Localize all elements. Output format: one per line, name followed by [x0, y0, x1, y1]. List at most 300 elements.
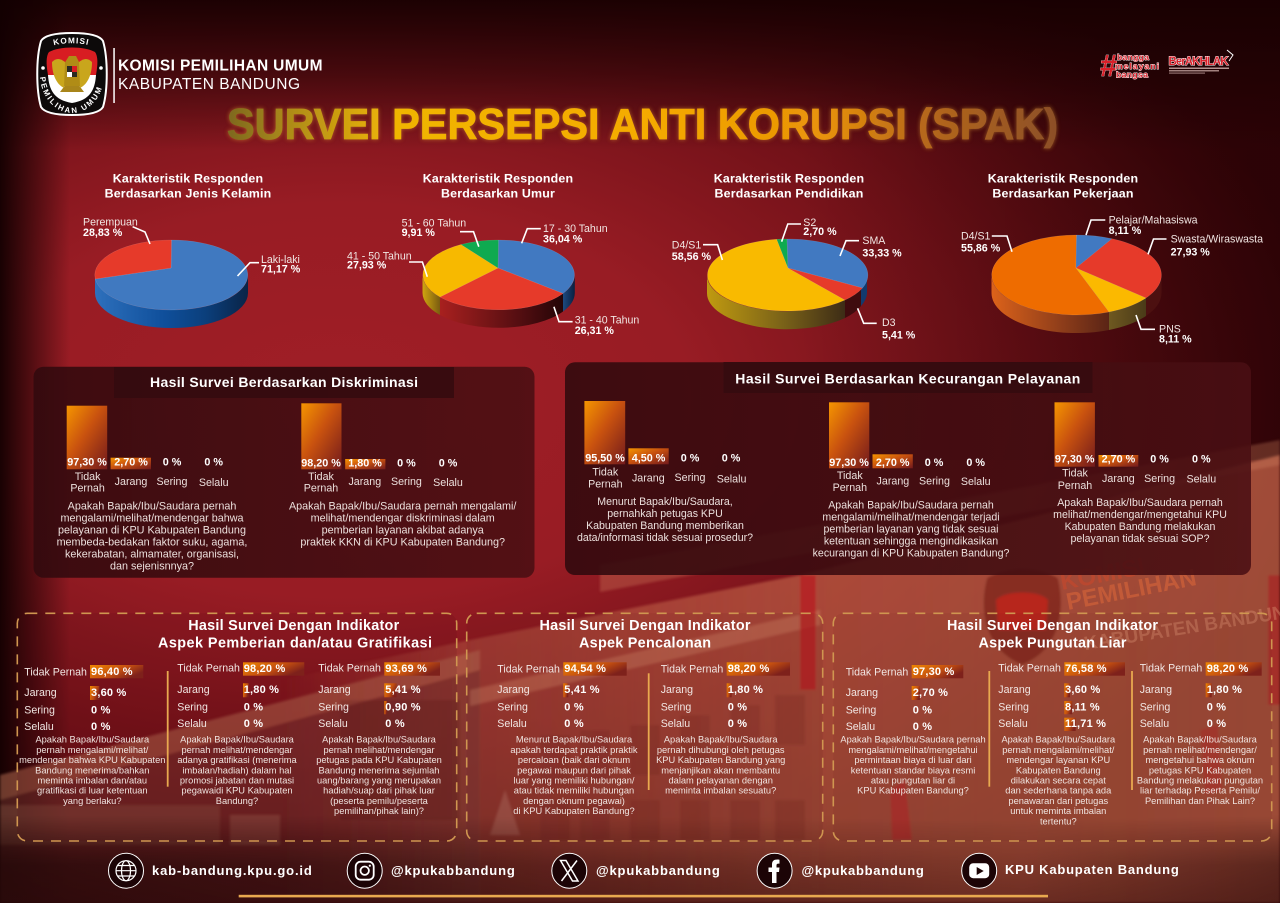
results: pungutan liar question 3: Jarang — [1140, 684, 1172, 696]
results: pencalonan question 1: 5,41 % — [564, 684, 600, 696]
question text: pernah melihat/mendengar/ — [1143, 745, 1257, 755]
question text: Apakah Bapak/Ibu/Saudara — [1143, 735, 1258, 745]
bar chart: question 3: Sering — [675, 472, 705, 484]
question 1 text: Apakah Bapak/Ibu/Saudara pernah — [68, 500, 236, 512]
question text: adanya gratifikasi (menerima — [177, 755, 298, 765]
bar chart: question 3: 4,50 % — [632, 453, 666, 465]
question text: dengan oknum pegawai) — [523, 796, 625, 806]
question text: hadiah/suap dari pihak luar — [323, 786, 435, 796]
label: 41-50 Tahun — [347, 250, 427, 277]
bar chart: question 3 — [584, 401, 747, 491]
question text: mendengar bahwa KPU Kabupaten — [19, 755, 165, 765]
panel: gratifikasi — [17, 613, 457, 841]
label: D4/S1 — [672, 239, 722, 263]
question text: di KPU Kabupaten Bandung? — [513, 806, 635, 816]
results: gratifikasi question 3: 93,69 % — [385, 663, 427, 675]
bar chart: question 5: 0 % — [1150, 454, 1169, 466]
results: gratifikasi question 1: 0 % — [91, 705, 111, 717]
bar chart: question 2 — [301, 403, 463, 495]
bar chart: question 4: Tidak — [837, 470, 863, 482]
bar chart: question 1: Sering — [157, 476, 187, 488]
bar chart: question 3: 0 % — [722, 453, 741, 465]
results: gratifikasi question 2: 98,20 % — [244, 663, 285, 675]
header logo: KPU emblem: PEMILIHAN UMUM — [40, 76, 102, 114]
chart heading: Karakteristik Responden — [423, 172, 573, 186]
bar chart: question 4: 0 % — [925, 457, 944, 469]
bar chart: question 1: Jarang — [115, 476, 147, 488]
results: pencalonan question 2: Jarang — [661, 684, 693, 696]
chart heading — [714, 172, 864, 200]
label: 17-30 Tahun: 17 - 30 Tahun — [543, 223, 608, 235]
question text: dan sederhana tanpa ada — [1005, 786, 1112, 796]
chart heading: Karakteristik Responden — [714, 172, 864, 186]
footer: X: @kpukabbandung — [596, 863, 720, 878]
results: pungutan liar question 2: 76,58 % — [1065, 663, 1107, 675]
header divider — [113, 48, 115, 103]
label: 51-60 Tahun: 51 - 60 Tahun — [402, 218, 466, 230]
question text: pernah melihat/mendengar — [323, 745, 435, 755]
bar chart: question 3: 95,50 % — [585, 453, 625, 465]
header logo: KPU emblem — [36, 32, 108, 116]
results: gratifikasi question 2: Selalu — [177, 718, 207, 730]
panel heading — [540, 618, 751, 651]
label: PNS: 8,11 % — [1159, 333, 1192, 345]
results: pencalonan question 1: 94,54 % — [564, 663, 606, 675]
results: pungutan liar question 1: 97,30 % — [913, 666, 954, 678]
results: gratifikasi question 2: 1,80 % — [244, 684, 279, 696]
results: pungutan liar question 2: Sering — [998, 701, 1029, 713]
results: gratifikasi question 3: Selalu — [318, 718, 348, 730]
panel heading: Hasil Survei Berdasarkan Diskriminasi — [150, 374, 418, 390]
results: gratifikasi question 3: 0,90 % — [385, 701, 421, 713]
results: gratifikasi question 3 — [318, 662, 440, 730]
results: pungutan liar question 2: 11,71 % — [1065, 718, 1106, 730]
title: SURVEI PERSEPSI ANTI KORUPSI (SPAK) — [227, 100, 1058, 149]
label: Laki-laki: 71,17 % — [261, 264, 301, 276]
results: pungutan liar question 1: 2,70 % — [913, 687, 948, 699]
question text: Apakah Bapak/Ibu/Saudara — [35, 735, 150, 745]
chart heading — [423, 172, 573, 200]
label: SMA: SMA — [862, 235, 886, 247]
divider — [167, 671, 169, 787]
results: gratifikasi question 2 — [177, 662, 304, 730]
background photo: KPU building: PEMILIHAN — [1064, 564, 1199, 616]
question 5 text: Kabupaten Bandung melakukan — [1065, 521, 1215, 533]
results: gratifikasi question 1 — [24, 665, 143, 733]
results: pencalonan question 1: Selalu — [497, 718, 527, 730]
results: pencalonan question 2: 98,20 % — [728, 663, 769, 675]
panel heading: Aspek Pemberian dan/atau Gratifikasi — [158, 635, 432, 651]
bar chart: question 5: Sering — [1144, 473, 1175, 485]
chart heading: Berdasarkan Umur — [441, 186, 555, 200]
panel: age pie chart — [347, 172, 639, 337]
label: 31-40 Tahun: 26,31 % — [575, 325, 614, 337]
chart heading — [988, 172, 1138, 200]
label: SMA: 33,33 % — [862, 248, 902, 260]
question 3 text: data/informasi tidak sesuai prosedur? — [577, 532, 753, 544]
bar chart: question 2: 1,80 % — [348, 458, 382, 470]
question text: atau tidak memiliki hubungan — [514, 786, 634, 796]
chart heading: Berdasarkan Pekerjaan — [992, 186, 1134, 200]
bar chart: question 5: Selalu — [1186, 474, 1216, 486]
label: Swasta/Wiraswasta: 27,93 % — [1171, 246, 1210, 258]
bar chart: question 2: Selalu — [433, 477, 463, 489]
bar chart: question 5: 2,70 % — [1102, 454, 1136, 466]
label: Swasta/Wiraswasta — [1148, 234, 1263, 258]
pie — [991, 235, 1162, 333]
label: Pelajar/Mahasiswa: 8,11 % — [1109, 225, 1142, 237]
bar chart: question 1 — [67, 406, 229, 495]
results: gratifikasi question 3: Sering — [318, 701, 349, 713]
results: gratifikasi question 2: Sering — [177, 701, 208, 713]
results: pungutan liar question 3: 1,80 % — [1207, 684, 1242, 696]
question text: pegawaidi KPU Kabupaten — [181, 786, 293, 796]
question text: pernah mengalami/melihat/ — [1002, 745, 1115, 755]
label: 17-30 Tahun: 36,04 % — [543, 234, 583, 246]
question 1 text: mengalami/melihat/mendengar bahwa — [60, 512, 244, 524]
label: D4/S1: 55,86 % — [961, 242, 1001, 254]
panel heading: Aspek Pungutan Liar — [978, 635, 1127, 651]
results: gratifikasi question 1: 3,60 % — [91, 687, 126, 699]
question 1 text: dan sejenisnnya? — [110, 560, 194, 572]
panel heading — [724, 362, 1092, 393]
question 5 text: pelayanan tidak sesuai SOP? — [1070, 533, 1210, 545]
results: gratifikasi question 2: 0 % — [244, 718, 263, 730]
results: gratifikasi question 3: Tidak Pernah — [318, 663, 381, 675]
question 4 text: kecurangan di KPU Kabupaten Bandung? — [813, 547, 1009, 559]
question text: imbalan/hadiah) dalam hal — [182, 765, 292, 775]
footer: facebook — [757, 853, 924, 888]
question text: gratifikasi di luar ketentuan — [37, 786, 148, 796]
question text: permintaan biaya di luar dari — [854, 755, 972, 765]
label: Pelajar/Mahasiswa: Pelajar/Mahasiswa — [1109, 214, 1198, 226]
question text: apakah terdapat praktik praktik — [510, 745, 638, 755]
panel: pungutan liar — [833, 613, 1272, 841]
question 5 text: Apakah Bapak/Ibu/Saudara pernah — [1057, 497, 1223, 509]
bar chart: question 3: 0 % — [681, 453, 700, 465]
question text: Apakah Bapak/Ibu/Saudara — [1001, 735, 1116, 745]
bar chart: question 4: 2,70 % — [876, 457, 910, 469]
question text: ketentuan standar biaya resmi — [851, 765, 975, 775]
label: Laki-laki: Laki-laki — [261, 254, 300, 266]
results: gratifikasi question 2: Tidak Pernah — [177, 663, 240, 675]
results: pungutan liar question 3: Tidak Pernah — [1140, 663, 1202, 675]
results: pungutan liar question 3: Selalu — [1140, 718, 1169, 730]
bar chart: question 5: Pernah — [1058, 480, 1092, 492]
results: gratifikasi question 3: 0 % — [385, 718, 405, 730]
question text: Apakah Bapak/Ibu/Saudara — [180, 735, 295, 745]
footer: X — [552, 853, 720, 888]
bar chart: question 4: 97,30 % — [829, 457, 869, 469]
results: pencalonan question 2: Selalu — [661, 718, 690, 730]
results: pencalonan question 2: Tidak Pernah — [661, 663, 723, 675]
bar chart: question 4: Selalu — [961, 476, 991, 488]
question 3 text: pernahkah petugas KPU — [607, 508, 723, 520]
footer: facebook: @kpukabbandung — [802, 863, 924, 878]
bar chart: question 2: Pernah — [304, 483, 338, 495]
bar chart: question 1: 97,30 % — [67, 457, 107, 469]
bar chart: question 5: 97,30 % — [1055, 454, 1095, 466]
results: pencalonan question 2: Sering — [661, 701, 691, 713]
question 1 text: membeda-bedakan faktor suku, agama, — [57, 536, 247, 548]
question 1 text: pelayanan di KPU Kabupaten Bandung — [58, 524, 246, 536]
bar chart: question 5: 0 % — [1192, 454, 1211, 466]
pie — [422, 240, 575, 328]
question text: meminta imbalan dan/atau — [38, 776, 147, 786]
panel: occupation pie chart — [961, 172, 1263, 345]
question 5 text: melihat/mendengar/mengetahui KPU — [1053, 509, 1227, 521]
footer: youtube — [962, 853, 1179, 888]
question text: untuk meminta imbalan — [1010, 806, 1106, 816]
panel heading: Hasil Survei Dengan Indikator — [188, 618, 400, 634]
label: 41-50 Tahun: 27,93 % — [347, 260, 387, 272]
results: pungutan liar question 2: Tidak Pernah — [998, 663, 1061, 675]
bar chart: question 5: Tidak — [1062, 468, 1089, 480]
label: S2 — [782, 217, 837, 242]
question text: pernah melihat/mendengar — [181, 745, 293, 755]
question 4 text: mengalami/melihat/mendengar terjadi — [822, 511, 1000, 523]
footer: website — [108, 853, 312, 888]
panel: kecurangan pelayanan — [565, 362, 1251, 575]
results: pungutan liar question 1: Tidak Pernah — [846, 667, 908, 679]
pie — [95, 240, 248, 328]
bar chart: question 1: 0 % — [204, 457, 223, 469]
panel heading — [947, 618, 1158, 651]
organisation name: KOMISI PEMILIHAN UMUM — [118, 58, 322, 75]
question text: pernah mengalami/melihat/ — [36, 745, 149, 755]
question text: Bandung menerima/bahkan — [35, 765, 149, 775]
panel: diskriminasi — [34, 367, 534, 578]
bar chart: question 4: 0 % — [966, 457, 985, 469]
panel heading: Aspek Pencalonan — [579, 635, 711, 651]
divider — [648, 673, 650, 790]
results: pungutan liar question 2: 8,11 % — [1065, 701, 1100, 713]
results: gratifikasi question 3: 5,41 % — [385, 684, 421, 696]
bar chart: question 4: Jarang — [877, 475, 909, 487]
question 2 text: praktek KKN di KPU Kabupaten Bandung? — [300, 536, 505, 548]
question text: pegawai maupun dari pihak — [517, 765, 631, 775]
bar chart: question 4: Pernah — [833, 482, 867, 494]
question text: pernah dihubungi oleh petugas — [657, 745, 785, 755]
logo: bangga melayani bangsa: melayani — [1115, 61, 1159, 71]
results: pungutan liar question 1: 0 % — [913, 705, 932, 717]
label: 51-60 Tahun — [402, 218, 479, 247]
results: pungutan liar question 2: Jarang — [998, 684, 1031, 696]
question 1 text: kekerabatan, almamater, organisasi, — [65, 548, 239, 560]
question text: KPU Kabupaten Bandung? — [857, 786, 969, 796]
chart heading: Berdasarkan Jenis Kelamin — [105, 186, 271, 200]
label: 41-50 Tahun: 41 - 50 Tahun — [347, 250, 412, 262]
divider — [988, 671, 990, 787]
results: gratifikasi question 1: Jarang — [24, 687, 57, 699]
question text: Apakah Bapak/Ibu/Saudara pernah — [840, 735, 986, 745]
bar chart: question 2: 0 % — [439, 458, 458, 470]
label: PNS — [1136, 315, 1192, 345]
results: pungutan liar question 1: Jarang — [846, 687, 878, 699]
label: 31-40 Tahun — [554, 307, 639, 337]
results: gratifikasi question 1: Sering — [24, 704, 55, 716]
question text: Bandung? — [216, 796, 258, 806]
results: pencalonan question 2: 0 % — [728, 718, 747, 730]
label: Perempuan: 28,83 % — [83, 227, 123, 239]
question 2 text: melihat/mendengar diskriminasi dalam — [311, 512, 495, 524]
panel heading: Hasil Survei Dengan Indikator — [947, 618, 1158, 634]
question 4 text: ketentuan sehingga mengindikasikan — [824, 535, 998, 547]
question text: Pemilihan dan Pihak Lain? — [1145, 796, 1255, 806]
bar chart: question 1: Selalu — [199, 477, 229, 489]
question text: uang/barang yang merupakan — [317, 776, 441, 786]
label: Laki-laki — [238, 254, 301, 276]
label: PNS: PNS — [1159, 323, 1181, 335]
label: Perempuan: Perempuan — [83, 217, 138, 229]
question text: Apakah Bapak/Ibu/Saudara — [664, 735, 778, 745]
results: pungutan liar question 2: 3,60 % — [1065, 684, 1100, 696]
panel heading — [158, 618, 432, 651]
results: pungutan liar question 3: 0 % — [1207, 718, 1226, 730]
question text: (peserta pemilu/peserta — [330, 796, 429, 806]
background photo: KPU building: KOMISI — [1058, 553, 1147, 596]
results: gratifikasi question 1: 0 % — [91, 721, 111, 733]
question text: mengalami/melihat/mengetahui — [848, 745, 978, 755]
question text: Kabupaten Bandung — [1016, 765, 1101, 775]
results: pencalonan question 1: 0 % — [564, 701, 584, 713]
question 2 text: pemberian layanan akibat adanya — [322, 524, 484, 536]
bar chart: question 2: 0 % — [397, 458, 416, 470]
logo: BerAKHLAK — [1168, 50, 1233, 74]
bar chart: question 3: Selalu — [717, 473, 747, 485]
results: pungutan liar question 3: Sering — [1140, 701, 1170, 713]
question 3 text: Kabupaten Bandung memberikan — [586, 520, 744, 532]
question text: atau pungutan liar di — [871, 776, 955, 786]
results: pencalonan question 1: Tidak Pernah — [497, 663, 560, 675]
question text: mengetahui bahwa oknum — [1145, 755, 1255, 765]
label: D4/S1: 58,56 % — [672, 251, 712, 263]
divider — [1131, 671, 1133, 790]
question text: Bandung melakukan pungutan — [1137, 776, 1263, 786]
results: pencalonan question 1 — [497, 662, 627, 730]
panel heading: Hasil Survei Dengan Indikator — [540, 618, 751, 634]
results: pungutan liar question 2 — [998, 662, 1125, 731]
bar chart: question 1: 0 % — [163, 457, 182, 469]
question text: luar yang memiliki hubungan/ — [514, 776, 635, 786]
results: pencalonan question 1: Sering — [497, 701, 528, 713]
results: pungutan liar question 3: 0 % — [1207, 701, 1226, 713]
bar chart: question 2: Tidak — [308, 471, 335, 483]
results: gratifikasi question 1: Selalu — [24, 721, 54, 733]
results: pungutan liar question 1: Selalu — [846, 721, 875, 733]
question text: petugas pada KPU Kabupaten — [316, 755, 442, 765]
question text: dilakukan secara cepat — [1011, 776, 1106, 786]
footer: instagram: @kpukabbandung — [391, 863, 515, 878]
panel heading: Hasil Survei Berdasarkan Kecurangan Pelayanan — [735, 370, 1080, 386]
bar chart: question 1: Tidak — [75, 471, 101, 483]
question text: petugas KPU Kabupaten — [1149, 765, 1251, 775]
question text: Bandung menerima sejumlah — [319, 765, 439, 775]
label: Swasta/Wiraswasta: Swasta/Wiraswasta — [1171, 234, 1263, 246]
question 4 text: Apakah Bapak/Ibu/Saudara pernah — [828, 499, 994, 511]
label: D3: 5,41 % — [882, 329, 916, 341]
results: pungutan liar question 2: Selalu — [998, 718, 1028, 730]
bar chart: question 2: Jarang — [348, 476, 381, 488]
organisation name: KABUPATEN BANDUNG — [118, 76, 300, 93]
question text: promosi jabatan dan mutasi — [180, 776, 294, 786]
label: D4/S1 — [961, 230, 1012, 254]
question 4 text: pemberian layanan yang tidak sesuai — [824, 523, 998, 535]
label: S2: S2 — [803, 217, 816, 229]
question text: mendengar layanan KPU — [1006, 755, 1110, 765]
results: pencalonan question 2 — [661, 662, 790, 730]
question text: tertentu? — [1040, 816, 1077, 826]
results: gratifikasi question 3: Jarang — [318, 684, 351, 696]
bar chart: question 5: Jarang — [1102, 473, 1135, 485]
label: SMA — [840, 235, 902, 260]
label: D4/S1: D4/S1 — [961, 230, 991, 242]
question text: KPU Kabupaten Bandung yang — [656, 755, 785, 765]
bar chart: question 4: Sering — [919, 475, 950, 487]
label: 17-30 Tahun — [522, 223, 608, 246]
panel: gender pie chart — [83, 172, 301, 328]
results: pencalonan question 1: Jarang — [497, 684, 530, 696]
question 2 text: Apakah Bapak/Ibu/Saudara pernah mengalami/ — [289, 500, 516, 512]
results: pungutan liar question 1 — [846, 665, 963, 733]
label: 31-40 Tahun: 31 - 40 Tahun — [575, 314, 639, 326]
label: D4/S1: D4/S1 — [672, 239, 701, 251]
question text: menjanjikan akan membantu — [661, 765, 780, 775]
chart heading: Karakteristik Responden — [113, 172, 263, 186]
chart heading — [105, 172, 271, 200]
label: Perempuan — [83, 217, 150, 244]
header logo: KPU emblem: KOMISI — [53, 38, 88, 46]
question 3 text: Menurut Bapak/Ibu/Saudara, — [597, 496, 733, 508]
background photo: KPU building — [0, 440, 1280, 903]
bar chart: question 2: 98,20 % — [301, 458, 341, 470]
bar chart: question 1: Pernah — [70, 483, 105, 495]
chart heading: Berdasarkan Pendidikan — [714, 186, 864, 200]
results: pungutan liar question 1: 0 % — [913, 721, 932, 733]
logo: bangga melayani bangsa — [1100, 48, 1159, 83]
footer: youtube: KPU Kabupaten Bandung — [1005, 862, 1179, 877]
footer: website: kab-bandung.kpu.go.id — [152, 863, 312, 878]
footer line — [239, 895, 1048, 897]
label: 51-60 Tahun: 9,91 % — [402, 227, 435, 239]
panel: education pie chart — [672, 172, 916, 341]
label: Pelajar/Mahasiswa — [1086, 214, 1198, 237]
results: pencalonan question 1: 0 % — [564, 718, 584, 730]
results: pungutan liar question 3: 98,20 % — [1207, 663, 1248, 675]
label: D3 — [858, 308, 916, 341]
logo: bangga melayani bangsa: bangsa — [1116, 70, 1148, 80]
panel heading — [114, 367, 454, 398]
bar chart: question 3: Tidak — [592, 467, 619, 479]
question text: liar terhadap Peserta Pemilu/ — [1140, 786, 1260, 796]
bar chart: question 1: 2,70 % — [114, 457, 148, 469]
pie — [707, 239, 868, 329]
label: S2: 2,70 % — [803, 226, 837, 238]
question text: dalam pelayanan dengan — [668, 776, 773, 786]
results: gratifikasi question 2: 0 % — [244, 701, 263, 713]
question text: penawaran dari petugas — [1008, 796, 1109, 806]
results: gratifikasi question 2: Jarang — [177, 684, 210, 696]
question text: percaloan (baik dari oknum — [518, 755, 630, 765]
bar chart: question 3: Jarang — [632, 473, 665, 485]
footer: instagram — [347, 853, 515, 888]
results: pungutan liar question 3 — [1140, 662, 1262, 730]
panel: pencalonan — [467, 613, 823, 841]
results: pencalonan question 2: 1,80 % — [728, 684, 763, 696]
results: pencalonan question 2: 0 % — [728, 701, 747, 713]
label: D3: D3 — [882, 317, 896, 329]
organisation name — [118, 58, 322, 93]
